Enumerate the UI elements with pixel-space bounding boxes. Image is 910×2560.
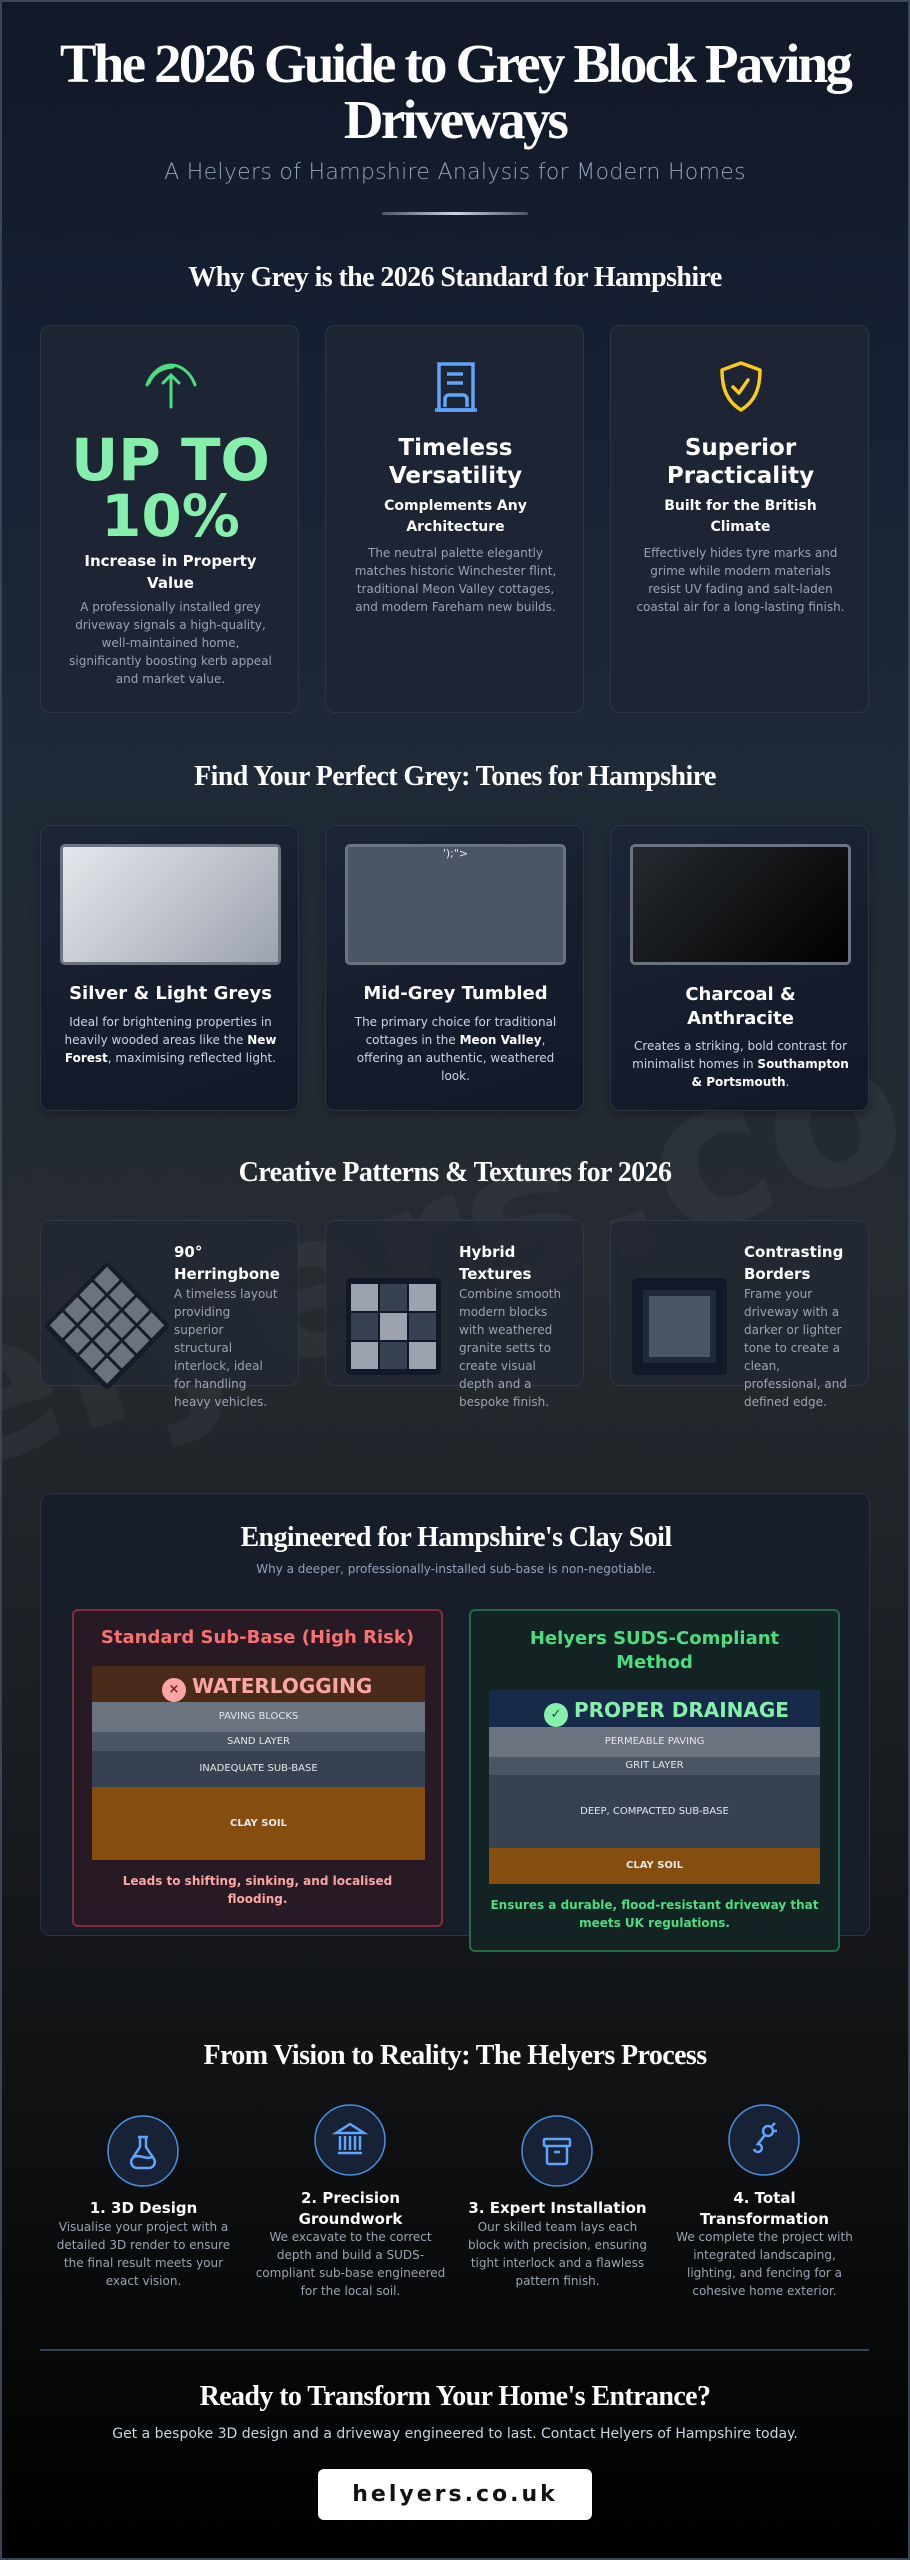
icon: building <box>435 362 477 412</box>
panel: superior practicality: Practicality <box>667 463 814 489</box>
step 1: Visualise your project with a detailed 3D render to ensure the final result meets your exact vision. <box>57 2220 230 2288</box>
panel: standard sub-base: Leads to shifting, sinking, and localised flooding. <box>123 1874 392 1906</box>
footer heading: Ready to Transform Your Home's Entrance? <box>200 2381 710 2412</box>
icon: sprout <box>146 364 196 408</box>
stat: 10% <box>101 482 240 550</box>
panel: SUDS method: Helyers SUDS-Compliant <box>530 1628 779 1649</box>
panel: timeless versatility: Timeless <box>398 435 512 461</box>
panel: herringbone: Herringbone <box>174 1265 280 1283</box>
panel: borders: Frame your driveway with a darker or lighter tone to create a clean, professional, and defined edge. <box>744 1287 847 1409</box>
step 4: Transformation <box>700 2210 829 2228</box>
diagram: waterlogged layers: INADEQUATE SUB-BASE <box>199 1763 318 1774</box>
step 1 <box>57 2115 230 2288</box>
diagram: drained layers: GRIT LAYER <box>625 1760 684 1771</box>
panel: borders: Borders <box>744 1265 810 1283</box>
icon: box <box>521 2115 593 2187</box>
panel: charcoal: Anthracite <box>687 1008 794 1029</box>
icon: flask <box>107 2115 179 2187</box>
button: website <box>318 2469 592 2520</box>
panel: SUDS method: Method <box>616 1652 693 1673</box>
diagram: waterlogged layers: SAND LAYER <box>227 1736 290 1747</box>
swatch: mid grey: ');"> <box>443 847 468 860</box>
step 4: We complete the project with integrated landscaping, lighting, and fencing for a cohesive home exterior. <box>676 2230 853 2298</box>
panel: hybrid: Combine smooth modern blocks with weathered granite setts to create visual depth and a bespoke finish. <box>459 1287 561 1409</box>
icon: shield <box>720 361 762 412</box>
icon: herringbone <box>45 1263 169 1390</box>
panel: herringbone: 90° <box>174 1243 202 1261</box>
panel: standard sub-base <box>72 1609 443 1927</box>
panel: clay soil: Why a deeper, professionally-installed sub-base is non-negotiable. <box>256 1562 656 1576</box>
panel: standard sub-base: Standard Sub-Base (High Risk) <box>101 1627 414 1648</box>
panel: mid grey <box>325 825 584 1111</box>
diagram: drained layers <box>489 1690 820 1884</box>
panel: property value: Increase in Property Value <box>84 552 257 592</box>
subtitle: A Helyers of Hampshire Analysis for Modern Homes <box>164 160 746 185</box>
panel: silver <box>40 825 299 1111</box>
title: The 2026 Guide to Grey Block Paving <box>60 33 850 94</box>
swatch: mid grey <box>345 844 566 965</box>
step 2: Groundwork <box>299 2210 402 2228</box>
step 2: We excavate to the correct depth and build a SUDS-compliant sub-base engineered for the local soil. <box>256 2230 445 2298</box>
step 1: 1. 3D Design <box>90 2199 197 2217</box>
title <box>60 33 852 150</box>
panel: mid grey: The primary choice for traditional cottages in the Meon Valley, offering an authentic, weathered look. <box>355 1015 556 1083</box>
step 3 <box>468 2115 647 2288</box>
diagram: waterlogged layers <box>92 1666 425 1860</box>
swatch: charcoal <box>630 844 851 965</box>
diagram: waterlogged layers: PAVING BLOCKS <box>219 1711 298 1722</box>
swatch: silver <box>60 844 281 965</box>
panel: hybrid: Hybrid <box>459 1243 515 1261</box>
panel: charcoal <box>610 825 869 1111</box>
icon: tools <box>728 2104 800 2176</box>
panel: herringbone <box>40 1220 299 1386</box>
panel: borders: Contrasting <box>744 1243 843 1261</box>
diagram: drained layers: ✓ <box>551 1707 561 1722</box>
panel: superior practicality <box>610 325 869 713</box>
diagram: drained layers: PERMEABLE PAVING <box>605 1736 704 1747</box>
diagram: drained layers: CLAY SOIL <box>626 1860 683 1871</box>
button: website: helyers.co.uk <box>352 2482 558 2507</box>
icon: bank <box>314 2104 386 2176</box>
step 4 <box>676 2104 853 2298</box>
stat: UP TO <box>71 426 270 494</box>
heading: tones: Find Your Perfect Grey: Tones for Hampshire <box>194 761 716 792</box>
step 3: 3. Expert Installation <box>468 2199 647 2217</box>
panel: mid grey: Mid-Grey Tumbled <box>363 983 548 1004</box>
panel: clay soil <box>40 1493 870 1936</box>
footer text: Get a bespoke 3D design and a driveway engineered to last. Contact Helyers of Hampshire today. <box>112 2426 798 2442</box>
panel: SUDS method <box>469 1609 840 1952</box>
panel: property value: A professionally installed grey driveway signals a high-quality, well-maintained home, significantly boosting kerb appeal and market value. <box>69 600 272 686</box>
panel: hybrid <box>325 1220 584 1386</box>
icon: border frame <box>632 1278 727 1375</box>
panel: superior practicality: Built for the British Climate <box>664 498 817 535</box>
panel: hybrid: Textures <box>459 1265 531 1283</box>
panel: superior practicality: Effectively hides tyre marks and grime while modern materials resist UV fading and salt-laden coastal air for a long-lasting finish. <box>636 546 845 614</box>
heading: Engineered for Hampshire's Clay Soil <box>240 1522 672 1553</box>
step 3: Our skilled team lays each block with precision, ensuring tight interlock and a flawless pattern finish. <box>468 2220 647 2288</box>
step 2 <box>256 2104 445 2298</box>
panel: borders <box>610 1220 869 1386</box>
panel: silver: Ideal for brightening properties in heavily wooded areas like the New Forest, maximising reflected light. <box>65 1015 276 1065</box>
step 4: 4. Total <box>733 2189 796 2207</box>
title: Driveways <box>344 89 566 150</box>
diagram: waterlogged layers: × <box>169 1682 179 1697</box>
panel: timeless versatility: Complements Any Architecture <box>384 498 527 535</box>
heading: process: From Vision to Reality: The Helyers Process <box>203 2040 706 2071</box>
diagram: waterlogged layers: WATERLOGGING <box>192 1674 372 1698</box>
panel: herringbone: A timeless layout providing superior structural interlock, ideal for handling heavy vehicles. <box>174 1287 278 1409</box>
heading: patterns: Creative Patterns & Textures for 2026 <box>239 1157 671 1188</box>
panel: timeless versatility: Versatility <box>389 463 522 489</box>
diagram: waterlogged layers: CLAY SOIL <box>230 1818 287 1829</box>
panel: SUDS method: Ensures a durable, flood-resistant driveway that meets UK regulations. <box>490 1898 818 1930</box>
icon: hybrid grid <box>346 1278 441 1375</box>
panel: superior practicality: Superior <box>685 435 796 461</box>
diagram: drained layers: PROPER DRAINAGE <box>574 1698 789 1722</box>
panel: charcoal: Charcoal & <box>685 984 796 1005</box>
stat <box>71 426 270 550</box>
panel: silver: Silver & Light Greys <box>69 983 272 1004</box>
panel: charcoal: Creates a striking, bold contrast for minimalist homes in Southampton & Portsmouth. <box>632 1039 849 1089</box>
panel: timeless versatility: The neutral palette elegantly matches historic Winchester flint, traditional Meon Valley cottages, and modern Fareham new builds. <box>355 546 556 614</box>
diagram: drained layers: DEEP, COMPACTED SUB-BASE <box>580 1806 729 1817</box>
panel: property value <box>40 325 299 713</box>
step 2: 2. Precision <box>301 2189 400 2207</box>
panel: timeless versatility <box>325 325 584 713</box>
heading: why grey: Why Grey is the 2026 Standard for Hampshire <box>188 262 722 293</box>
